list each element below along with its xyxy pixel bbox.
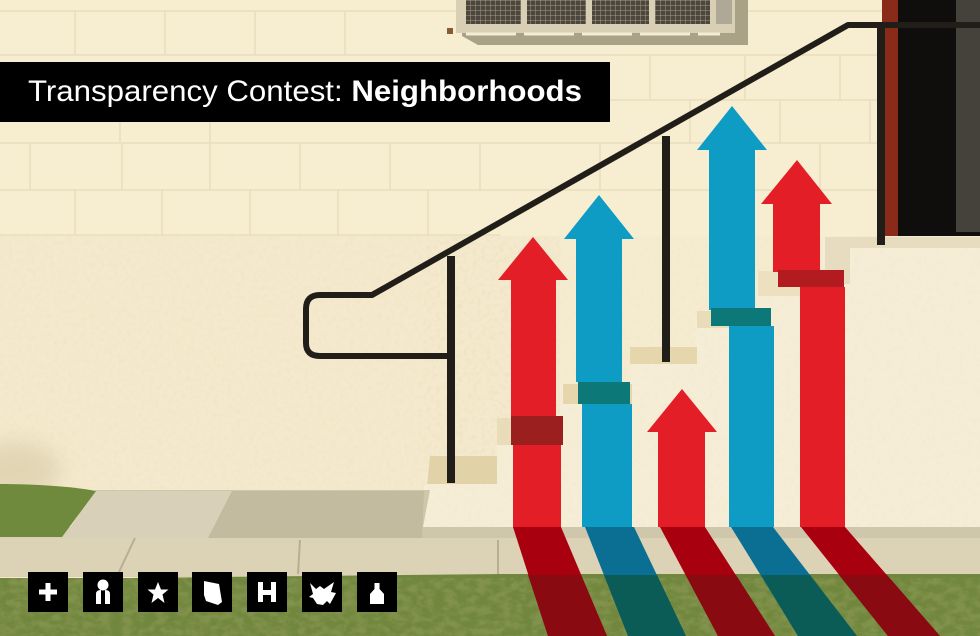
blue arrow 1 <box>564 195 686 636</box>
icon: star <box>138 572 178 612</box>
icon: bottle <box>357 572 397 612</box>
icon: eagle crest <box>302 572 342 612</box>
blue arrow 2 <box>697 106 857 636</box>
sidewalk <box>0 490 980 577</box>
concrete stairs <box>424 237 980 530</box>
red arrow 1 <box>498 237 607 636</box>
window grate <box>447 0 748 45</box>
icon: letter H <box>247 572 287 612</box>
title banner <box>0 62 610 122</box>
red arrow 2 <box>647 389 775 636</box>
icon: rolled map <box>192 572 232 612</box>
title text: Transparency Contest: Neighborhoods <box>28 75 582 108</box>
stair handrail <box>306 25 980 483</box>
doorway <box>882 0 980 236</box>
icon: person with tie <box>83 572 123 612</box>
grass <box>0 484 980 636</box>
red arrow 3 <box>761 160 940 636</box>
category icons row <box>28 572 397 612</box>
icon: plus <box>28 572 68 612</box>
